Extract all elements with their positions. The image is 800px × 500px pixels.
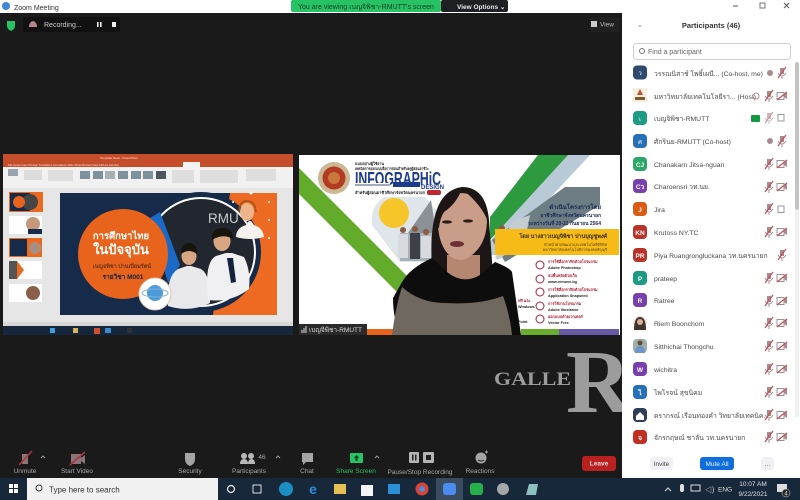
pause stop recording: Pause/Stop Recording bbox=[387, 469, 453, 476]
participant 6: Cว bbox=[636, 184, 645, 191]
right details bbox=[495, 203, 619, 325]
right details: ดำเนินโครงการโดย bbox=[549, 203, 601, 211]
shared PowerPoint screen bbox=[3, 154, 293, 335]
right details: Point bbox=[518, 320, 528, 324]
leave button bbox=[582, 456, 616, 471]
name tag: เบญจิพิชา-RMUTT bbox=[309, 326, 362, 334]
search box bbox=[634, 44, 790, 60]
view button bbox=[590, 17, 620, 32]
right details: ลบพื้นหลังด้วยเว็บ bbox=[548, 272, 578, 278]
right details: Adobe Illustrator bbox=[548, 308, 579, 312]
start video bbox=[61, 452, 93, 475]
invite button bbox=[650, 457, 673, 470]
participant 14 bbox=[633, 362, 787, 376]
participant 3: เ bbox=[639, 117, 641, 123]
participant 7 bbox=[633, 202, 784, 216]
participant 9: Piya Ruangrongluckana วท.นครนายก bbox=[654, 253, 768, 260]
ribbon bbox=[3, 167, 293, 188]
view button: View bbox=[600, 22, 614, 28]
right details: การใช้สื่อกราฟิกด้วยโปรแกรม bbox=[548, 258, 598, 264]
participant 15: ไ bbox=[637, 388, 642, 397]
participants: Participants bbox=[232, 468, 267, 475]
leave button: Leave bbox=[590, 460, 609, 468]
participant 2: มหาวิทยาลัยเทคโนโลยีรา... (Host) bbox=[654, 92, 756, 101]
right details: อาชีวศึกษาจังหวัดนครนายก bbox=[540, 212, 601, 219]
participant 3 bbox=[633, 111, 784, 125]
students photo bbox=[168, 228, 249, 309]
unmute: Unmute bbox=[14, 468, 37, 475]
slide: ในปัจจุบัน bbox=[93, 241, 149, 258]
task icons bbox=[228, 478, 538, 500]
neck bbox=[447, 255, 480, 285]
right details: www.remove.bg bbox=[547, 280, 578, 284]
search box bbox=[27, 478, 218, 500]
status bar bbox=[3, 322, 293, 326]
participant 5: Chanakarn Jitsa-nguan bbox=[654, 162, 724, 169]
system tray: 9/22/2021 bbox=[739, 491, 768, 498]
building image bbox=[372, 197, 470, 262]
participant 9: PR bbox=[635, 253, 645, 260]
chat: Chat bbox=[300, 468, 314, 475]
right details: Vector Free bbox=[548, 321, 569, 325]
participant 4: ศ bbox=[638, 139, 642, 146]
presenter bbox=[392, 187, 521, 335]
black top bbox=[393, 258, 521, 335]
PowerPoint title bar bbox=[3, 154, 293, 167]
search box: Type here to search bbox=[49, 486, 120, 494]
presenter video bbox=[299, 155, 620, 335]
participants panel: ⌄ bbox=[637, 22, 643, 29]
participant 10: P bbox=[638, 276, 643, 283]
participant 15 bbox=[633, 385, 787, 399]
participant 1: วรรณนิสาช์ โพธิ์เผนี... (Co-host, me) bbox=[654, 68, 763, 78]
pause stop recording bbox=[387, 452, 453, 476]
infographic title bbox=[355, 160, 444, 196]
group photo right bbox=[497, 225, 513, 252]
participant 6 bbox=[633, 179, 787, 193]
globe badge bbox=[139, 278, 171, 310]
participant 7: J bbox=[638, 207, 642, 214]
infographic title: DESIGN bbox=[421, 185, 444, 191]
task icons: e bbox=[309, 481, 317, 497]
invite button: Invite bbox=[654, 461, 670, 468]
reactions bbox=[466, 450, 495, 475]
participant 3: เบญจิพิชา-RMUTT bbox=[654, 115, 709, 123]
participant 17 bbox=[633, 430, 787, 444]
participant 11: Ratree bbox=[654, 298, 675, 305]
participant 2 bbox=[633, 88, 787, 102]
participant 8 bbox=[633, 225, 787, 239]
meeting background bbox=[0, 13, 622, 478]
infographic title: เทคนิคการออกแบบสื่อการสอนสำหรับครูผู้สอนอาชีวะ bbox=[355, 165, 429, 172]
slide thumbnails bbox=[9, 192, 43, 302]
security bbox=[178, 453, 202, 475]
right details: ฟรี และ bbox=[518, 297, 531, 303]
right details: ระหว่างวันที่ 20-22 กันยายน 2564 bbox=[528, 219, 601, 227]
participant 11: R bbox=[638, 298, 643, 305]
participant 8: KN bbox=[635, 230, 645, 237]
unmute bbox=[14, 451, 45, 475]
participant 1 bbox=[633, 66, 786, 80]
right details: Application Snapseed bbox=[548, 294, 588, 298]
right details: ออกแบบด้วยเวกเตอร์ bbox=[548, 313, 584, 319]
right details: Adobe Photoshop bbox=[548, 266, 581, 270]
participants bbox=[232, 453, 280, 475]
participant 9 bbox=[633, 248, 786, 262]
participant 14: wichitra bbox=[653, 367, 677, 374]
screen share banner bbox=[291, 0, 508, 12]
participant 10 bbox=[633, 271, 787, 285]
system tray: ◁) bbox=[705, 486, 714, 494]
slide: รายวิชา M001 bbox=[103, 273, 144, 281]
participant 12 bbox=[633, 316, 787, 330]
screen share banner: You are viewing เบญจิพิชา-RMUTT's screen bbox=[298, 3, 434, 11]
right details: การใช้งานโปรแกรม bbox=[548, 300, 582, 306]
system tray: 10:07 AM bbox=[739, 481, 767, 488]
start button bbox=[9, 484, 18, 493]
more button bbox=[761, 457, 774, 470]
participant 13: Sitthichai Thongchu bbox=[654, 344, 714, 351]
reactions: Reactions bbox=[466, 468, 495, 475]
windows taskbar bbox=[0, 478, 800, 500]
slide: เบญจพิชา ปานเปี่ยมรัตน์ bbox=[93, 262, 151, 270]
chat bbox=[300, 453, 314, 475]
gallery view watermark: R bbox=[566, 333, 632, 432]
mute all button: Mute All bbox=[705, 461, 729, 468]
infographic title: แบบอย่างผู้ใช้งาน bbox=[355, 160, 384, 167]
security: Security bbox=[178, 468, 202, 475]
infographic title: สำหรับผู้สอนอาชีวศึกษาจังหวัดนครนายก bbox=[355, 189, 426, 196]
participant 15: ไพโรจน์ สุขนิคม bbox=[653, 388, 702, 397]
participant 5 bbox=[633, 157, 787, 171]
right details: การใช้สื่อกราฟิกด้วยโปรแกรม bbox=[548, 286, 598, 292]
participant 17: จักรกฤษณ์ ชาลัน วท.นครนายก bbox=[654, 434, 745, 442]
recording status bbox=[7, 17, 120, 32]
participant 5: CJ bbox=[636, 162, 645, 169]
right details: Windows bbox=[518, 305, 535, 309]
participants panel bbox=[622, 13, 800, 478]
participant 17: จ bbox=[638, 435, 642, 442]
participant 13 bbox=[633, 339, 787, 353]
slide: RMU bbox=[208, 211, 239, 226]
right details: หัวหน้าฝ่ายพัฒนาและเทคโนโลยีดิจิทัล bbox=[544, 242, 608, 247]
mute all button bbox=[700, 457, 734, 470]
infographic title: INFOGRAPHiC bbox=[355, 169, 441, 189]
gallery view watermark bbox=[494, 333, 632, 432]
scrollbar bbox=[795, 62, 799, 210]
system tray bbox=[665, 481, 790, 498]
start video: Start Video bbox=[61, 468, 93, 475]
agent icon bbox=[232, 192, 270, 239]
share screen bbox=[336, 453, 379, 475]
PowerPoint title bar: File Home Insert Design Transitions Animations Slide Show Review View Add-ins Acrobat bbox=[8, 163, 119, 167]
meeting toolbar bbox=[14, 450, 616, 476]
participant 6: Charoensri วท.นย. bbox=[654, 184, 710, 191]
participant 16: ดรากรณ์ เรือนทองคำ วิทยาลัยเทคนิค... bbox=[654, 412, 769, 420]
participant 10: prateep bbox=[654, 276, 677, 283]
title bar bbox=[0, 0, 800, 13]
face bbox=[438, 193, 487, 260]
name tag bbox=[299, 324, 367, 335]
right details: มหาวิทยาลัยเทคโนโลยีราชมงคลธัญบุรี bbox=[543, 247, 607, 253]
participant 14: W bbox=[637, 367, 644, 374]
search box: Find a participant bbox=[648, 49, 702, 56]
participant 7: Jira bbox=[654, 207, 665, 214]
participant rows bbox=[633, 66, 787, 444]
slide heading: การศึกษาไทย bbox=[93, 230, 149, 242]
participants: 46 bbox=[258, 454, 266, 461]
right details: โดย นางสาวเบญจิพิชา ปานบุญชูพงศ์ bbox=[518, 232, 608, 241]
participant 4: ศักรินย-RMUTT (Co-host) bbox=[654, 138, 731, 146]
group photo left bbox=[398, 226, 431, 259]
system tray: ENG bbox=[718, 486, 732, 494]
participant 1: ว bbox=[638, 71, 642, 77]
PowerPoint title bar: Template Deck - PowerPoint bbox=[100, 156, 138, 160]
hair bbox=[432, 187, 493, 305]
title bar: Zoom Meeting bbox=[14, 5, 59, 12]
recording status: Recording... bbox=[44, 22, 82, 29]
participant 11 bbox=[633, 293, 787, 307]
mouth bbox=[450, 241, 464, 247]
share screen: Share Screen bbox=[336, 468, 376, 475]
eyes bbox=[442, 220, 452, 224]
Windows taskbar in share bbox=[3, 326, 293, 335]
green diagonal stripes bbox=[299, 168, 415, 310]
slide bbox=[60, 192, 277, 315]
participant 8: Krutoss NY.TC bbox=[654, 230, 699, 237]
colour strip bbox=[366, 329, 619, 335]
seal logo bbox=[318, 162, 350, 194]
system tray: 4 bbox=[784, 492, 788, 498]
panel heading: Participants (46) bbox=[682, 21, 741, 30]
grey dress bbox=[392, 287, 512, 335]
more button: ... bbox=[765, 461, 770, 468]
participant 16 bbox=[633, 408, 787, 422]
participant 12: Riem Boonchom bbox=[654, 321, 705, 328]
participant 4 bbox=[633, 134, 786, 148]
gallery view watermark: GALLE bbox=[494, 369, 571, 390]
screen share banner: View Options ⌄ bbox=[457, 4, 505, 11]
